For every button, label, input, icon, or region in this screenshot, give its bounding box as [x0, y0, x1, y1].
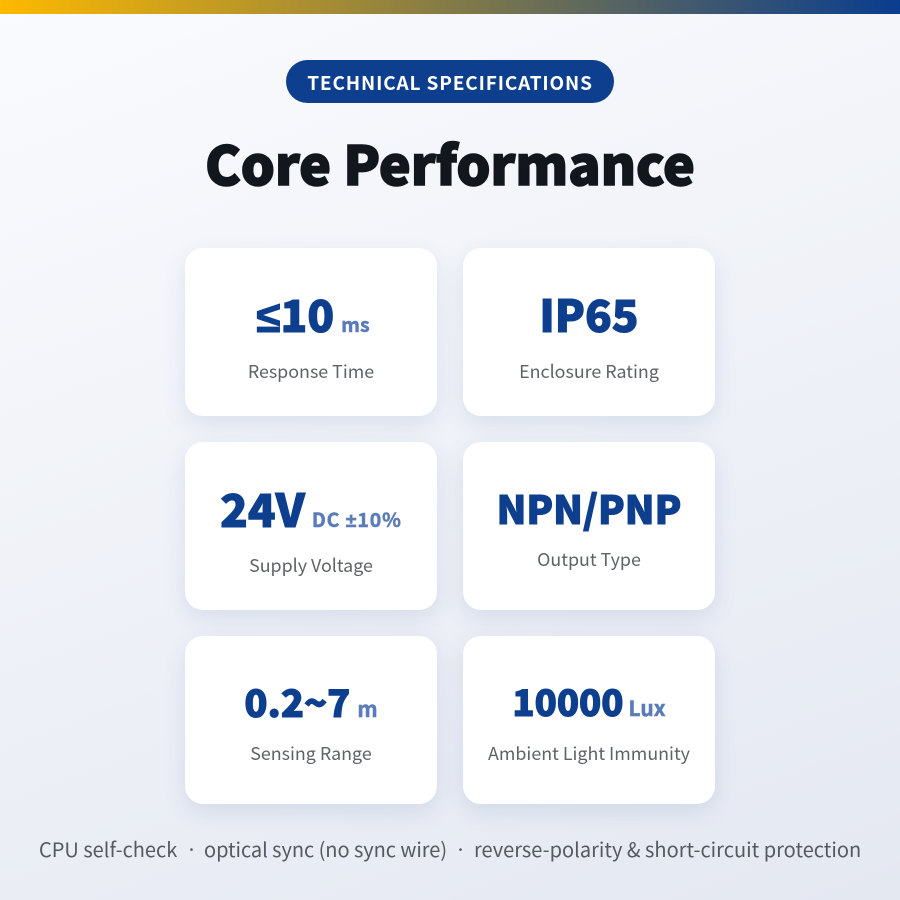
card: response time: Response Time: [248, 358, 374, 384]
card: sensing range: Sensing Range: [250, 740, 372, 766]
card: output type: Output Type: [537, 546, 641, 572]
card: ambient light immunity: 10000Lux: [512, 674, 666, 727]
card: output type: [463, 442, 715, 610]
card: ambient light immunity: [463, 636, 715, 804]
card: sensing range: 0.2~7 m: [244, 673, 378, 728]
card: ambient light immunity: Ambient Light Immunity: [488, 740, 690, 766]
card: enclosure rating: Enclosure Rating: [519, 358, 659, 384]
footer note: reverse-polarity & short-circuit protection: [474, 834, 861, 863]
card: enclosure rating: IP65: [539, 281, 639, 345]
card: enclosure rating: [463, 248, 715, 416]
card: sensing range: [185, 636, 437, 804]
card: response time: [185, 248, 437, 416]
footer note: [39, 834, 861, 863]
card: supply voltage: Supply Voltage: [249, 552, 373, 578]
top gradient bar: [0, 0, 900, 14]
card: response time: ≤10 ms: [256, 281, 370, 345]
card: supply voltage: 24V DC ±10%: [220, 475, 402, 541]
footer note: CPU self-check: [39, 834, 177, 863]
footer note: optical sync (no sync wire): [204, 834, 447, 863]
footer note: ·: [455, 834, 466, 863]
badge: technical specifications: [286, 60, 614, 103]
card: output type: NPN/PNP: [497, 480, 681, 536]
card: supply voltage: [185, 442, 437, 610]
badge: technical specifications: TECHNICAL SPECIFICATIONS: [307, 69, 593, 96]
title: Core Performance: [205, 124, 695, 201]
footer note: ·: [186, 834, 197, 863]
